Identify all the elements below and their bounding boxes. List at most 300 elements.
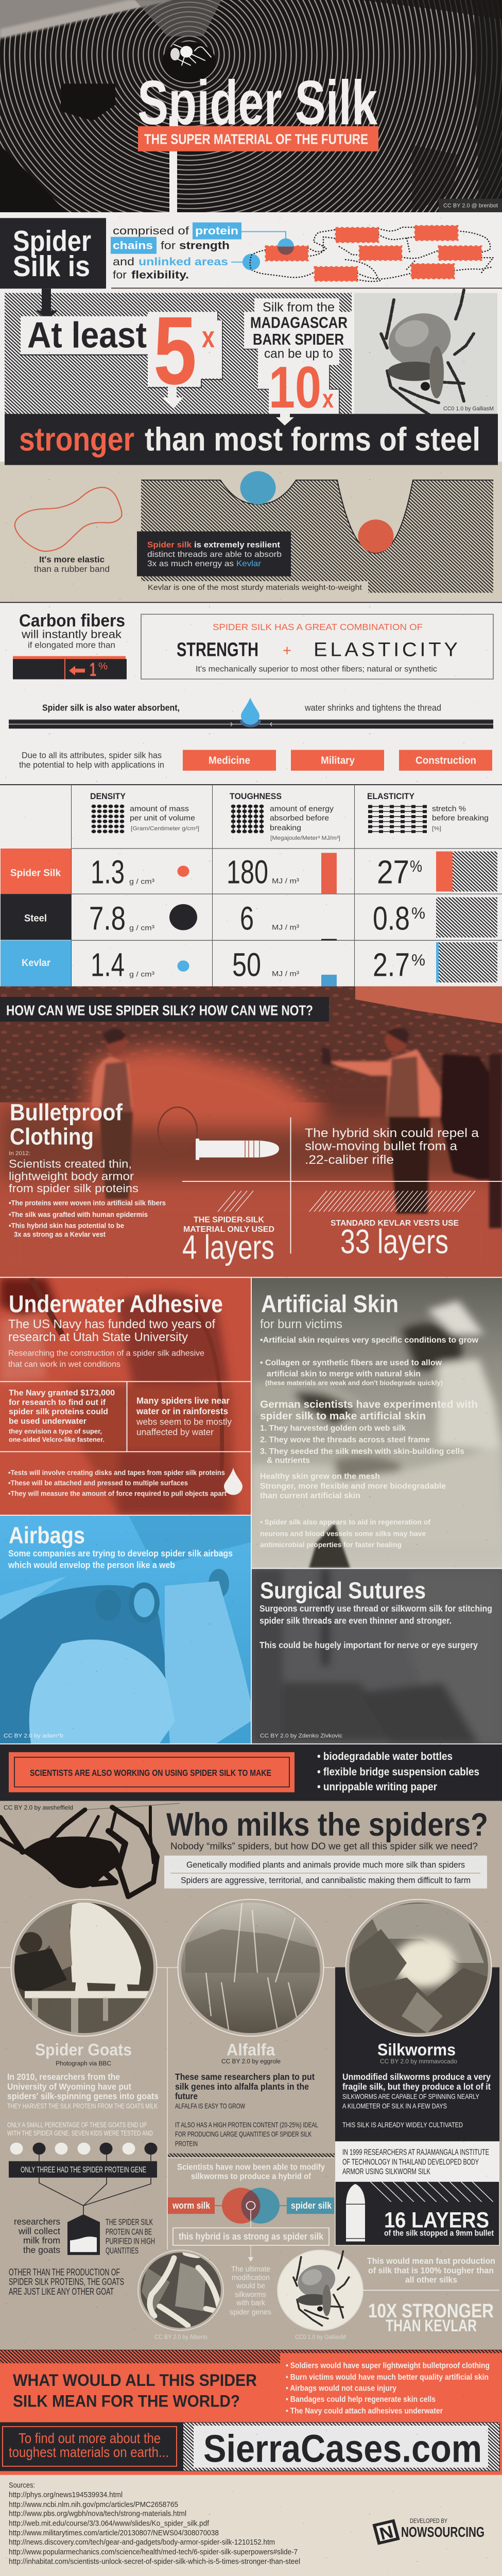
arrows: converging lines (39, 2178, 151, 2214)
text: tests list: •They will measure the amount of force required to pull objects apart (8, 1490, 227, 1498)
callout: only three: ONLY THREE HAD THE SPIDER PROTEIN GENE (21, 2165, 146, 2174)
row: spider silk: g / cm³ (129, 878, 154, 886)
icon: milk bottle (67, 2214, 100, 2255)
callout: hybrid strength (173, 2228, 329, 2245)
title decoration: extended letter stem (169, 116, 177, 212)
list: other uses: • unrippable writing paper (317, 1781, 437, 1793)
photo: spider silhouette (0, 1803, 179, 1896)
icon: 9mm bullet (346, 2184, 365, 2242)
panel: strength + elasticity: + (283, 641, 291, 659)
chart: hybrid silk venn diagram: worm silk (172, 2200, 210, 2211)
column: alfalfa: CC BY 2.0 by eggrole (221, 2058, 281, 2065)
text: ultimate modification: spider genes (230, 2308, 271, 2316)
row: kevlar: g / cm³ (129, 971, 154, 979)
icon: rubber band (15, 487, 122, 551)
text: spiders near water: webs seem to be mostly (136, 1416, 232, 1427)
callout: why not farm spiders: Genetically modified plants and animals provide much more silk than spiders (186, 1860, 465, 1870)
text: ultimate modification: would be (236, 2282, 265, 2291)
callout: madagascar bark spider 10x (244, 298, 354, 420)
callout: spider silk resilient: is extremely resilient (194, 540, 281, 549)
column: density header: DENSITY (90, 791, 126, 801)
icon: thread (9, 719, 493, 728)
panel: bulletproof clothing photo (0, 986, 502, 1281)
column: alfalfa: CC BY 2.0 by Alberto (154, 2334, 207, 2341)
text: bulletproof clothing: Clothing (10, 1124, 94, 1149)
list: benefits (286, 2361, 490, 2416)
description text: and (113, 256, 134, 268)
text: spiders near water: water or in rainforests (136, 1405, 228, 1416)
description text: for (113, 268, 127, 281)
row: kevlar: 2.7 (373, 946, 410, 983)
column: toughness header: [Megajoule/Meter³ MJ/m³] (270, 835, 340, 841)
heading box (0, 218, 106, 289)
column: spider goats: SPIDER SILK PROTEINS, THE GOATS (9, 2277, 124, 2287)
list: benefits: • The Navy could attach adhesives underwater (286, 2406, 443, 2416)
panel: carbon fibers: Carbon fibers (19, 611, 125, 631)
column: alfalfa: These same researchers plan to put (175, 2072, 315, 2082)
row: spider silk: % (410, 857, 422, 875)
callout: at least 5x (21, 297, 222, 405)
panel: sources: http://www.pbs.org/wgbh/nova/tech/strong-materials.html (9, 2510, 186, 2518)
row: kevlar: MJ / m³ (272, 970, 299, 978)
callout: at least 5x: x (202, 320, 215, 353)
text: ultimate modification (230, 2265, 271, 2316)
note: kevlar (141, 581, 368, 593)
panel: airbags: Some companies are trying to develop spider silk airbags (8, 1548, 233, 1558)
button: medicine (183, 750, 276, 771)
photo: bark spider (354, 290, 497, 414)
icon: bullet (196, 1139, 279, 1160)
panel: sources (0, 2475, 502, 2576)
chart: spider silk 4 layers: THE SPIDER-SILK (194, 1215, 264, 1224)
panel: water absorbent: water shrinks and tightens the thread (304, 702, 441, 713)
row: steel: 7.8 (89, 900, 126, 937)
text: skin requirements (260, 1335, 478, 1387)
column: density header: per unit of volume (130, 814, 195, 822)
chart: 1 percent bar (13, 656, 127, 681)
column: elasticity header (367, 791, 489, 833)
description text: for (161, 239, 176, 251)
callout: spider silk resilient (137, 531, 291, 577)
column: elasticity header: ELASTICITY (367, 791, 414, 801)
heading bar (0, 997, 329, 1022)
text: hybrid skin (305, 1126, 479, 1167)
column: alfalfa: silkworms to produce a hybrid of (191, 2171, 311, 2181)
chart: 1 percent bar: % (98, 661, 108, 672)
panel: airbags: CC BY 2.0 by adam*b (4, 1733, 63, 1739)
list: benefits: • Bandages could help regenerate skin cells (286, 2395, 436, 2404)
text: bulletproof clothing: Scientists created thin, (9, 1157, 132, 1170)
text: tests list (8, 1469, 227, 1498)
arrow: 10x down (276, 410, 294, 426)
column: spider goats: the goats (23, 2245, 60, 2255)
description text: flexibility. (131, 268, 189, 281)
panel: elasticity and resilience (0, 462, 502, 603)
text: german scientists: Healthy skin grew on the mesh (260, 1472, 380, 1481)
text: german scientists (260, 1398, 478, 1549)
table: material comparison (0, 784, 502, 986)
text: ultimate modification: The ultimate (231, 2265, 270, 2274)
text: navy grant: one-sided Velcro-like fastener. (9, 1436, 105, 1443)
photo: bark spider: CC0 1.0 by GalliasM (443, 406, 494, 412)
panel: paper background upper (0, 212, 502, 986)
column: toughness header: amount of energy (270, 805, 334, 814)
panel: surgical sutures: CC BY 2.0 by Zdenko Zivkovic (260, 1733, 342, 1739)
panel: strength + elasticity (141, 614, 493, 679)
text: navy grant: The Navy granted $173,000 (9, 1388, 115, 1397)
column: spider goats: THEY HARVEST THE SILK PROTEIN FROM THE GOATS MILK (7, 2103, 158, 2110)
panel: surgical sutures: spider silk threads are even thinner and stronger. (259, 1615, 452, 1625)
panel: hero photo of spider web (0, 0, 502, 212)
button: medicine: Medicine (209, 754, 250, 767)
text: more elastic: It's more elastic (39, 554, 105, 564)
heading: WHAT WOULD ALL THIS SPIDER (13, 2371, 257, 2390)
column: silkworms: Silkworms (377, 2040, 456, 2059)
text: navy grant (9, 1388, 115, 1443)
text: bulletproof clothing (9, 1099, 166, 1238)
callout: toughest materials (3, 2427, 177, 2466)
button: construction (399, 750, 492, 771)
description text (111, 223, 241, 281)
column: alfalfa: Scientists have now been able to modify (177, 2162, 325, 2172)
text: german scientists: • Spider silk also appears to aid in regeneration of (260, 1518, 430, 1527)
panel: artificial skin (252, 1278, 502, 1568)
text: bulletproof clothing: •The proteins were woven into artificial silk fibers (9, 1199, 166, 1207)
list: other uses (317, 1750, 479, 1793)
row: steel: 0.8 (373, 900, 410, 937)
text: navy grant: spider silk proteins could (9, 1407, 108, 1416)
figure: man firing pistol, right (322, 1026, 502, 1228)
chart: spider silk 4 layers (182, 1191, 274, 1266)
chart: spider silk 4 layers: 4 layers (182, 1229, 274, 1266)
description text: chains (113, 239, 153, 251)
protein chain diagram (231, 226, 493, 281)
callout: madagascar bark spider 10x: 10 (269, 355, 321, 420)
logo: nowsourcing (374, 2517, 484, 2545)
panel: surgical sutures: Surgical Sutures (260, 1578, 426, 1603)
panel: artificial skin: Artificial Skin (261, 1291, 399, 1318)
text: german scientists: 3. They seeded the silk mesh with skin-building cells (260, 1447, 464, 1456)
callout: 16 layers (335, 2181, 499, 2245)
column: toughness header: absorbed before (270, 814, 329, 822)
chart: 1 percent bar: 1 (90, 659, 96, 681)
photo credit (439, 199, 502, 212)
column: spider goats: spiders' silk-spinning genes into goats (7, 2091, 159, 2102)
subtitle banner: THE SUPER MATERIAL OF THE FUTURE (144, 131, 368, 147)
row: kevlar: 50 (232, 946, 261, 983)
column: alfalfa: silk genes into alfalfa plants in the (175, 2081, 309, 2092)
panel: stronger than most forms of steel (5, 410, 498, 465)
icon: spider on web (170, 44, 211, 65)
text: german scientists: spider silk to make artificial skin (260, 1410, 426, 1422)
panel: underwater adhesive: Researching the construction of a spider silk adhesive (8, 1349, 204, 1358)
panel: artificial skin: for burn victims (260, 1317, 342, 1331)
panel: who milks the spiders: CC BY 2.0 by awsheffield (4, 1804, 73, 1811)
text: more elastic: than a rubber band (34, 564, 110, 574)
column: toughness header (230, 791, 340, 841)
panel: underwater adhesive (0, 1278, 251, 1515)
column: elasticity header: stretch % (432, 805, 466, 814)
stat: 10x stronger than kevlar (368, 2300, 494, 2335)
row: steel: MJ / m³ (272, 924, 299, 931)
column: spider goats: ARE JUST LIKE ANY OTHER GOAT (9, 2286, 114, 2297)
text: german scientists: German scientists have experimented with (260, 1398, 478, 1411)
panel: surgical sutures (252, 1569, 502, 1743)
figure: man in vest, left (92, 1029, 133, 1199)
subtitle banner (138, 126, 378, 151)
panel: underwater adhesive: research at Utah State University (8, 1330, 188, 1344)
panel: underwater adhesive: Underwater Adhesive (9, 1291, 223, 1318)
chart: kevlar 33 layers: 33 layers (340, 1223, 448, 1261)
panel: water absorbent: Spider silk is also water absorbent, (42, 702, 180, 713)
text: german scientists: than current artificial skin (260, 1492, 360, 1500)
photo: nurse and patient, grey duotone (252, 1278, 502, 1568)
panel: sources: http://www.militarytimes.com/article/20130807/NEWS04/308070038 (9, 2529, 219, 2537)
photo: bullet test, red duotone (0, 986, 502, 1281)
text: bulletproof clothing: •The silk was grafted with human epidermis (9, 1210, 148, 1218)
callout: toughest materials: To find out more about the (19, 2431, 161, 2447)
photo: alfalfa field (175, 1900, 324, 2036)
column: spider goats: University of Wyoming have put (7, 2081, 131, 2092)
photo credit: CC BY 2.0 @ brenbot (443, 203, 498, 209)
text: german scientists: 1. They harvested golden orb web silk (260, 1423, 406, 1433)
text: tests list: •These will be attached and pressed to multiple surfaces (8, 1479, 188, 1487)
logo: nowsourcing: N (377, 2522, 395, 2544)
panel: sources: http://news.discovery.com/tech/gear-and-gadgets/body-armor-spider-silk-1210152.htm (9, 2538, 275, 2547)
column: spider goats: PROTEIN CAN BE (106, 2227, 152, 2236)
photo: bark spider circle (278, 2250, 363, 2330)
title: Spider Silk (137, 67, 378, 138)
text: german scientists: neurons and blood vessels some silks may have (260, 1530, 426, 1538)
panel: applications: Due to all its attributes, spider silk has (22, 750, 162, 760)
text: ultimate modification: modification (232, 2274, 270, 2282)
panel: applications: the potential to help with applications in (19, 760, 164, 770)
panel: sources: Sources: (9, 2481, 35, 2489)
arrow: 5x down (163, 387, 183, 408)
row: spider silk: 1.3 (91, 853, 125, 890)
text: hybrid skin: The hybrid skin could repel a (305, 1126, 479, 1140)
text: skin requirements: (these materials are weak and don't biodegrade quickly) (265, 1379, 443, 1387)
text: ultimate modification: with bark (236, 2299, 265, 2307)
column: spider goats: QUANTITIES (106, 2246, 139, 2256)
column lines (0, 1967, 336, 1968)
row: kevlar: 1.4 (91, 946, 125, 983)
column: silkworms: CC BY 2.0 by mmmavocado (380, 2058, 457, 2065)
panel: strength + elasticity: SPIDER SILK HAS A GREAT COMBINATION OF (213, 621, 423, 632)
panel: sources: http://www.ncbi.nlm.nih.gov/pmc/articles/PMC2658765 (9, 2500, 178, 2509)
column: density header: [Gram/Centimeter g/cm³] (131, 825, 199, 832)
column: alfalfa: ALFALFA IS EASY TO GROW (175, 2103, 245, 2110)
panel: water absorbent (9, 698, 493, 728)
panel: who milks the spiders: Nobody “milks” spiders, but how DO we get all this spider silk we need? (170, 1841, 478, 1852)
divider rule (111, 287, 502, 289)
column: alfalfa: Alfalfa (227, 2040, 275, 2059)
column: spider goats: will collect (18, 2226, 60, 2236)
heading box: Spider (13, 225, 91, 258)
column: silkworms (335, 2040, 499, 2335)
callout: madagascar bark spider 10x: BARK SPIDER (253, 330, 344, 348)
panel: strength + elasticity: ELASTICITY (314, 639, 458, 660)
white gutters between application panels (0, 1277, 502, 1746)
column: alfalfa: future (175, 2091, 198, 2102)
heading: SILK MEAN FOR THE WORLD? (13, 2392, 240, 2411)
panel: other uses banner (0, 1744, 502, 1801)
text: spiders near water: unaffected by water (136, 1427, 214, 1437)
text: bulletproof clothing: •This hybrid skin has potential to be (9, 1222, 124, 1230)
photo: silkworm cocoons (345, 1900, 494, 2036)
heading (13, 2371, 257, 2411)
row: steel: % (411, 904, 425, 922)
column: toughness header: breaking (270, 824, 301, 832)
text: bulletproof clothing: from spider silk proteins (9, 1182, 139, 1195)
photo: surgeon, grey duotone (252, 1569, 502, 1743)
text: german scientists: antimicrobial properties for faster healing (260, 1541, 402, 1549)
heading bar: HOW CAN WE USE SPIDER SILK? HOW CAN WE NOT? (6, 1003, 313, 1019)
text: german scientists: Stronger, more flexible and more biodegradable (260, 1482, 446, 1490)
panel: spider silk is (0, 218, 502, 289)
column: spider goats: milk from (23, 2235, 60, 2245)
text: navy grant: be used underwater (9, 1417, 87, 1426)
column: density header: amount of mass (130, 805, 189, 814)
text: navy grant: they envision a type of super, (9, 1428, 102, 1435)
divider lines (182, 1117, 502, 1253)
list: benefits: • Airbags would not cause injury (286, 2384, 397, 2393)
callout: madagascar bark spider 10x: MADAGASCAR (250, 313, 348, 331)
column: alfalfa (138, 2040, 363, 2341)
column: spider goats: researchers (14, 2216, 60, 2227)
panel: underwater adhesive: that can work in wet conditions (8, 1360, 120, 1369)
row: steel: 6 (240, 900, 254, 937)
callout: why not farm spiders: Spiders are aggressive, territorial, and cannibalistic making them difficult to farm (181, 1875, 471, 1885)
row: kevlar: Kevlar (22, 958, 50, 969)
column: toughness header: TOUGHNESS (230, 791, 282, 801)
text: bulletproof clothing: In 2012: (9, 1150, 30, 1157)
column: alfalfa: PROTEIN (175, 2140, 198, 2148)
panel: carbon fibers (13, 611, 127, 681)
text: spiders near water (136, 1395, 232, 1437)
chart: resilience terrain (141, 471, 493, 593)
photo: silkworms circle (138, 2250, 224, 2330)
callout: toughest materials: toughest materials on earth... (9, 2445, 169, 2461)
panel: carbon fibers: will instantly break (21, 628, 122, 641)
icon: water drop (240, 698, 261, 727)
panel: sources: http://inhabitat.com/scientists-unlock-secret-of-spider-silk-which-is-5-times-stronger-than-steel (9, 2557, 300, 2566)
panel: airbags: which would envelop the person like a web (8, 1560, 175, 1570)
panel: strength + elasticity: It's mechanically superior to most other fibers; natural or synthetic (196, 665, 437, 673)
row: kevlar (1, 940, 497, 986)
panel: sources: http://www.popularmechanics.com/science/health/med-tech/6-spider-silk-superpowers#slide-7 (9, 2548, 298, 2556)
column: spider goats: In 2010, researchers from the (7, 2072, 120, 2082)
panel: applications (19, 750, 492, 771)
note: kevlar: Kevlar is one of the most sturdy materials weight-to-weight (148, 583, 362, 592)
text: skin requirements: •Artificial skin requires very specific conditions to grow (260, 1335, 478, 1345)
column: alfalfa: FOR PRODUCING LARGE QUANTITIES OF SPIDER SILK (175, 2130, 311, 2139)
text: skin requirements: • Collagen or synthetic fibers are used to allow (260, 1359, 442, 1367)
photo: diver, red duotone (0, 1278, 251, 1515)
column: spider goats: PURIFIED IN HIGH (106, 2236, 155, 2246)
column: silkworms: THIS SILK IS ALREADY WIDELY CULTIVATED (342, 2122, 463, 2129)
callout: at least 5x: At least (27, 315, 147, 355)
photo: goat being milked (10, 1900, 160, 2037)
row: spider silk: MJ / m³ (272, 877, 299, 885)
callout: spider silk resilient: 3x as much energy as (147, 559, 234, 568)
callout: thailand body armor: ARMOR USING SILKWORM SILK (342, 2167, 430, 2176)
text: tests list: •Tests will involve creating disks and tapes from spider silk proteins (8, 1469, 225, 1477)
callout: madagascar bark spider 10x: x (322, 384, 334, 413)
button: military (291, 750, 384, 771)
column: silkworms: A KILOMETER OF SILK IN A FEW DAYS (342, 2103, 447, 2110)
text: german scientists: & nutrients (267, 1456, 310, 1465)
panel: underwater adhesive: The US Navy has funded two years of (8, 1317, 216, 1331)
callout: why not farm spiders (164, 1856, 487, 1889)
panel: airbags (0, 1516, 251, 1743)
chart: kevlar 33 layers: STANDARD KEVLAR VESTS USE (331, 1218, 459, 1228)
chart: kevlar 33 layers (318, 1201, 471, 1261)
callout: madagascar bark spider 10x: Silk from the (263, 299, 335, 314)
row: kevlar: % (411, 951, 425, 969)
column: spider goats: OTHER THAN THE PRODUCTION OF (9, 2267, 120, 2278)
panel: who milks the spiders (0, 1801, 502, 2350)
panel: sources: http://web.mit.edu/course/3/3.064/www/slides/Ko_spider_silk.pdf (9, 2519, 210, 2528)
logo: nowsourcing: DEVELOPED BY (410, 2517, 447, 2524)
callout: at least 5x: 5 (153, 297, 197, 405)
text: ultimate modification: silkworms (235, 2291, 266, 2299)
column: spider goats: THE SPIDER SILK (106, 2217, 153, 2227)
row: steel: Steel (24, 913, 47, 924)
chart: hybrid silk venn diagram: spider silk (291, 2200, 332, 2211)
photo: deployed airbag, blue duotone (0, 1516, 251, 1743)
column: spider goats: WITH THE SPIDER GENE. SEVEN KIDS WERE TESTED AND (7, 2129, 153, 2138)
callout: scientists also working: SCIENTISTS ARE ALSO WORKING ON USING SPIDER SILK TO MAKE (30, 1767, 271, 1778)
button: military: Military (321, 754, 355, 767)
text: bulletproof clothing: lightweight body armor (9, 1170, 134, 1183)
callout: spider silk resilient: Spider silk (147, 540, 192, 549)
chart: seven kids tested (10, 2143, 158, 2161)
icon: white water drop (224, 1468, 243, 1495)
list: other uses: • biodegradable water bottles (317, 1750, 453, 1762)
text: hybrid skin: .22-caliber rifle (305, 1153, 394, 1167)
callout: hybrid strength: this hybrid is as strong as spider silk (179, 2231, 323, 2242)
column: alfalfa: IT ALSO HAS A HIGH PROTEIN CONTENT (20-25%) IDEAL (175, 2122, 318, 2129)
panel: stronger than most forms of steel: stronger (19, 421, 134, 457)
text: german scientists: 2. They wove the threads across steel frame (260, 1435, 430, 1444)
text: fast production (367, 2256, 495, 2284)
text: spiders near water: Many spiders live near (136, 1395, 230, 1405)
callout: madagascar bark spider 10x: can be up to (264, 346, 333, 361)
column: spider goats: ONLY A SMALL PERCENTAGE OF THESE GOATS END UP (7, 2122, 147, 2129)
panel: sources: http://phys.org/news194539934.html (9, 2490, 123, 2499)
panel: carbon fibers: if elongated more than (28, 640, 115, 650)
arrow: heading down (36, 289, 58, 320)
panel: what would it mean (0, 2350, 502, 2475)
description text: unlinked areas (139, 256, 228, 268)
panel: airbags: Airbags (9, 1522, 85, 1548)
chart: spider silk 4 layers: MATERIAL ONLY USED (183, 1225, 274, 1234)
panel: call to action (0, 2422, 500, 2471)
text: hybrid skin: slow-moving bullet from a (305, 1139, 458, 1153)
row: spider silk: Spider Silk (10, 868, 61, 878)
row: spider silk: 27 (377, 853, 409, 890)
row: spider silk (1, 849, 497, 894)
heading box: Silk is (13, 250, 90, 282)
row: steel (1, 894, 497, 940)
callout: only three (9, 2161, 157, 2178)
column: density header (90, 791, 199, 834)
text: skin requirements: artificial skin to merge with natural skin (267, 1369, 421, 1379)
callout: thailand body armor (335, 2141, 499, 2181)
text: bulletproof clothing: Bulletproof (10, 1099, 123, 1125)
row: steel: g / cm³ (129, 924, 154, 932)
